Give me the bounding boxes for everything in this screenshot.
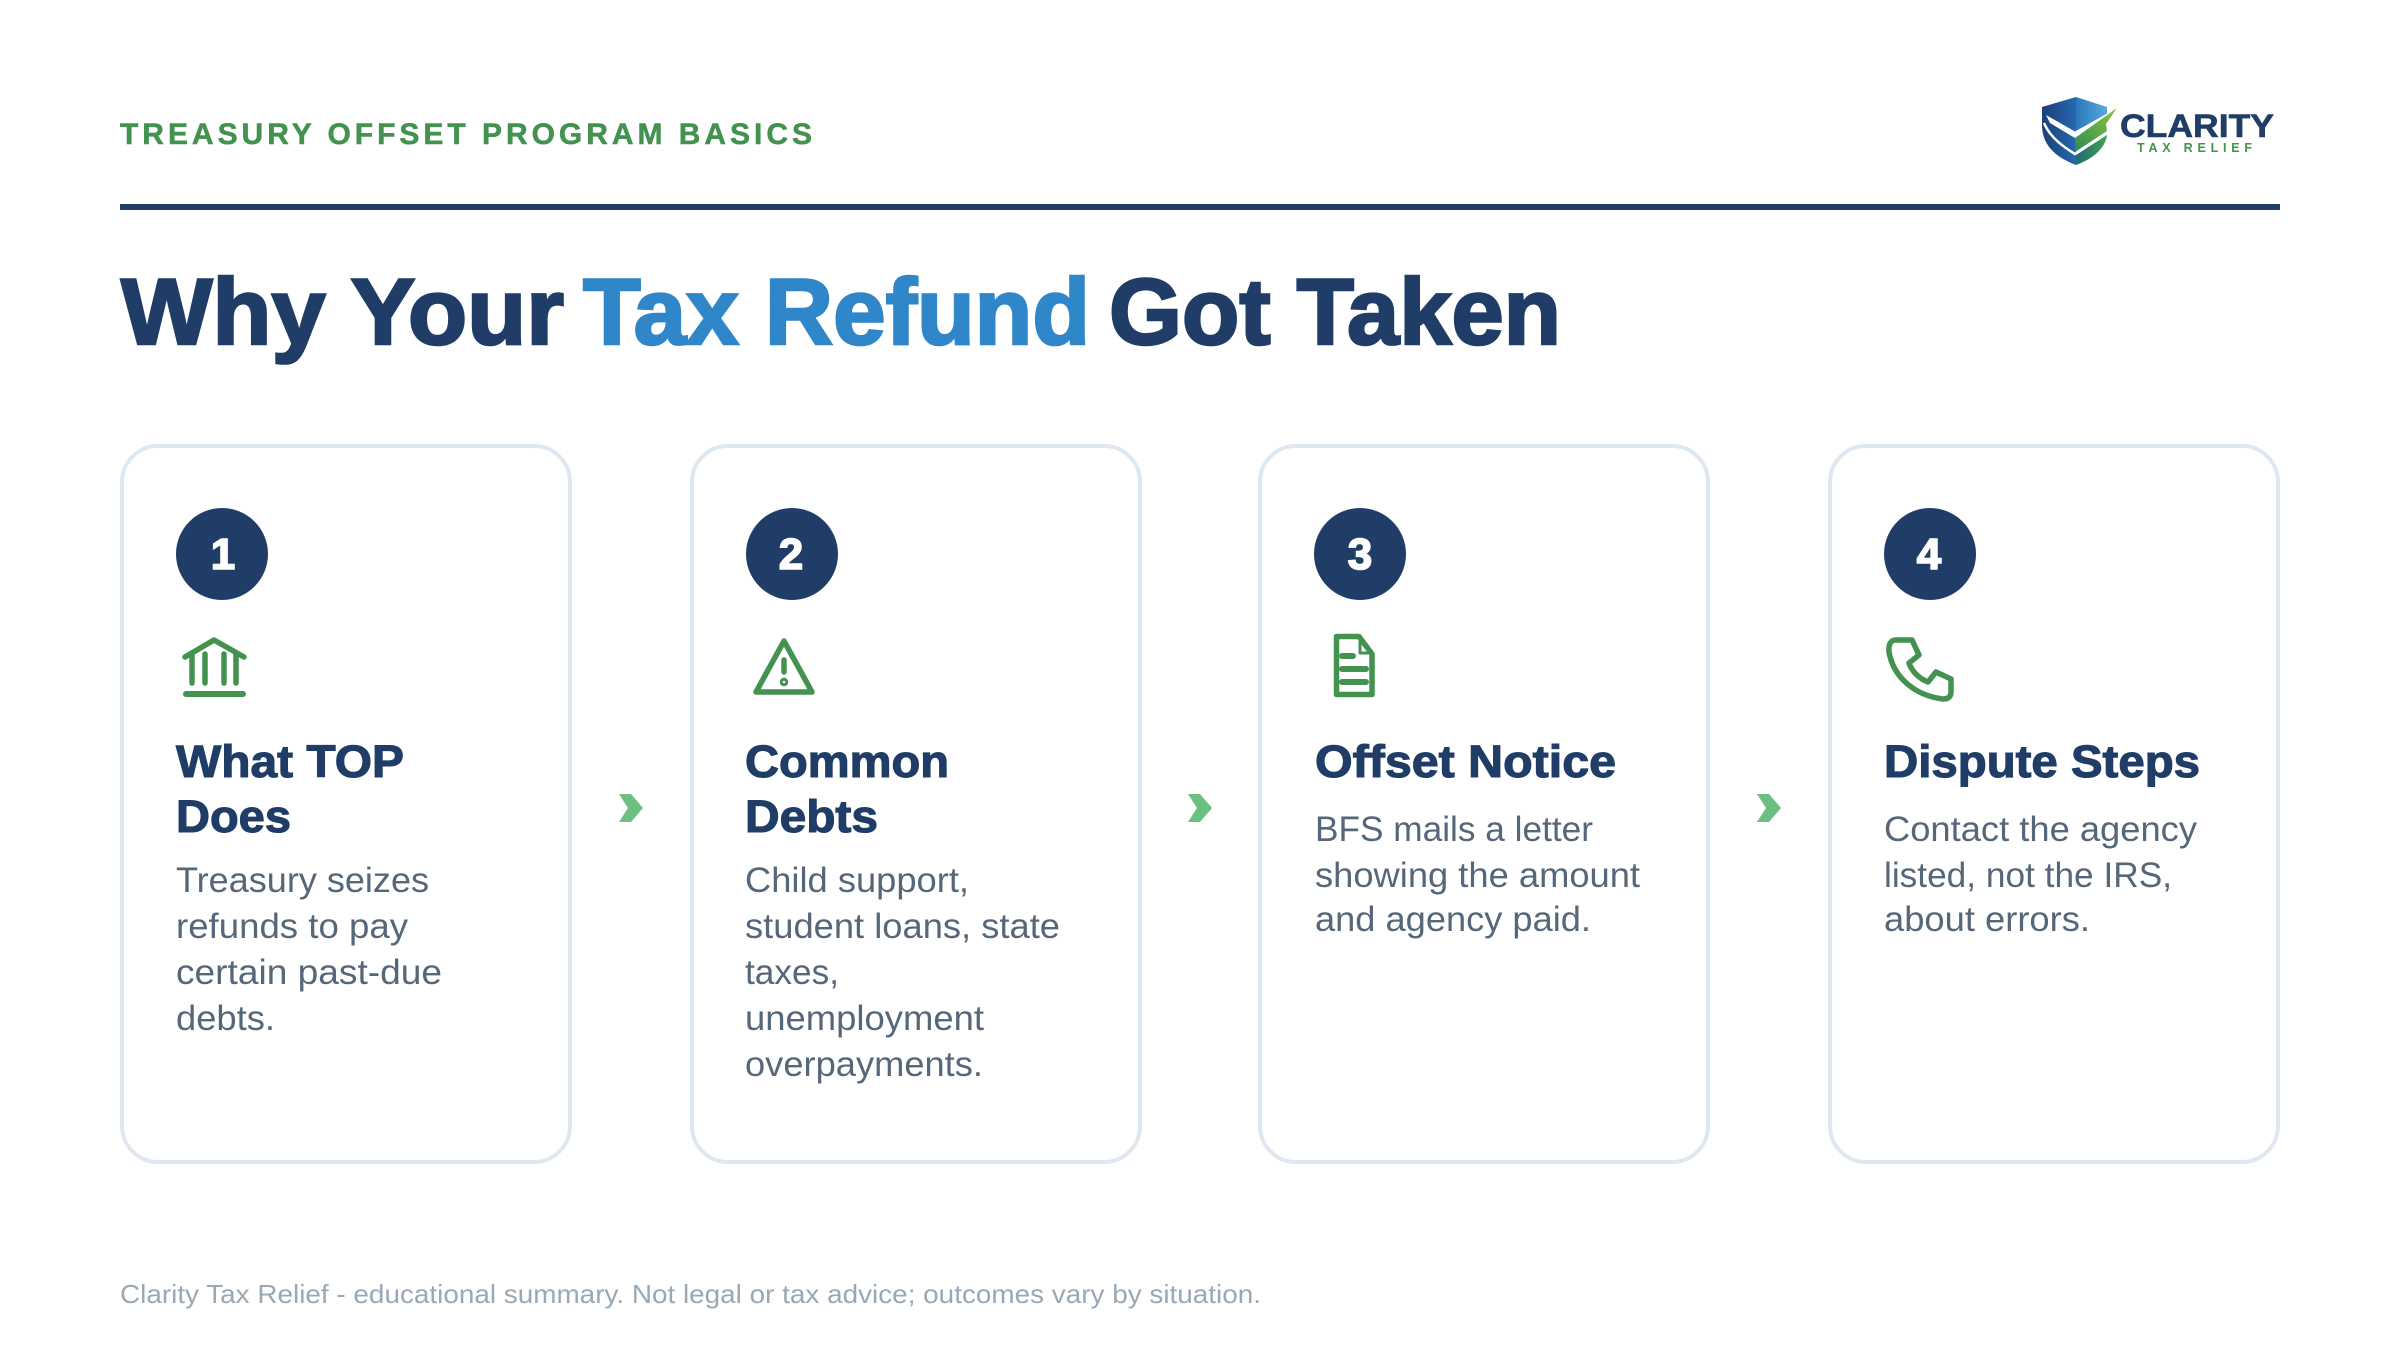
step 2 heading [745,736,949,842]
step number 4: 4 [1917,530,1942,579]
step 3 body: showing the amount [1315,856,1640,895]
panel: step 2 Common Debts [692,446,1140,1162]
arrow 1 [619,794,643,822]
step 1 body: Treasury seizes [176,861,429,900]
title [121,259,1561,364]
title: Why Your [121,259,564,364]
step 3 body [1315,810,1640,939]
step 2 body: overpayments. [745,1045,983,1084]
panel: step 4 Dispute Steps [1830,446,2278,1162]
step 1 body: certain past-due [176,953,442,992]
step number 3 [1314,508,1406,600]
header rule [120,204,2280,210]
step 4 body [1884,810,2198,939]
step 3 body: BFS mails a letter [1315,810,1593,849]
step 2 heading: Common [745,736,949,787]
step 3 heading: Offset Notice [1315,736,1616,787]
icon: shield with checkmark [2042,97,2117,165]
step 1 body: refunds to pay [176,907,409,946]
logo wordmark: CLARITY [2120,108,2274,144]
step 2 body: unemployment [745,999,984,1038]
footer disclaimer: Clarity Tax Relief - educational summary. Not legal or tax advice; outcomes vary by situation. [120,1279,1261,1309]
step number 2: 2 [779,530,803,579]
step number 1 [176,508,268,600]
step number 3: 3 [1348,530,1372,579]
step 1 body [176,861,442,1038]
panel: step 3 Offset Notice [1260,446,1708,1162]
icon: bank [185,640,244,694]
title: Tax Refund [583,259,1090,364]
panel: step 1 What TOP Does [122,446,570,1162]
step 4 body: Contact the agency [1884,810,2198,849]
icon: warning triangle [756,641,812,692]
step 1 heading: Does [176,791,291,842]
step 3 body: and agency paid. [1315,900,1591,939]
step 1 heading: What TOP [176,736,404,787]
step 4 body: listed, not the IRS, [1884,856,2172,895]
step number 1: 1 [211,530,235,579]
step number 2 [746,508,838,600]
step number 4 [1884,508,1976,600]
logo tagline: TAX RELIEF [2137,141,2252,155]
step 2 body: taxes, [745,953,839,992]
step 2 body: Child support, [745,861,969,900]
step 4 body: about errors. [1884,900,2090,939]
step 2 body: student loans, state [745,907,1060,946]
icon: phone [1889,640,1951,699]
arrow 2 [1188,794,1212,822]
title: Got Taken [1109,259,1561,364]
step 1 body: debts. [176,999,275,1038]
step 4 heading: Dispute Steps [1884,736,2200,787]
arrow 3 [1757,794,1781,822]
eyebrow heading: TREASURY OFFSET PROGRAM BASICS [120,118,812,151]
logo: Clarity Tax Relief [2042,97,2274,165]
step 2 heading: Debts [745,791,878,842]
step 1 heading [176,736,404,842]
step 2 body [745,861,1060,1084]
icon: document [1336,636,1372,694]
